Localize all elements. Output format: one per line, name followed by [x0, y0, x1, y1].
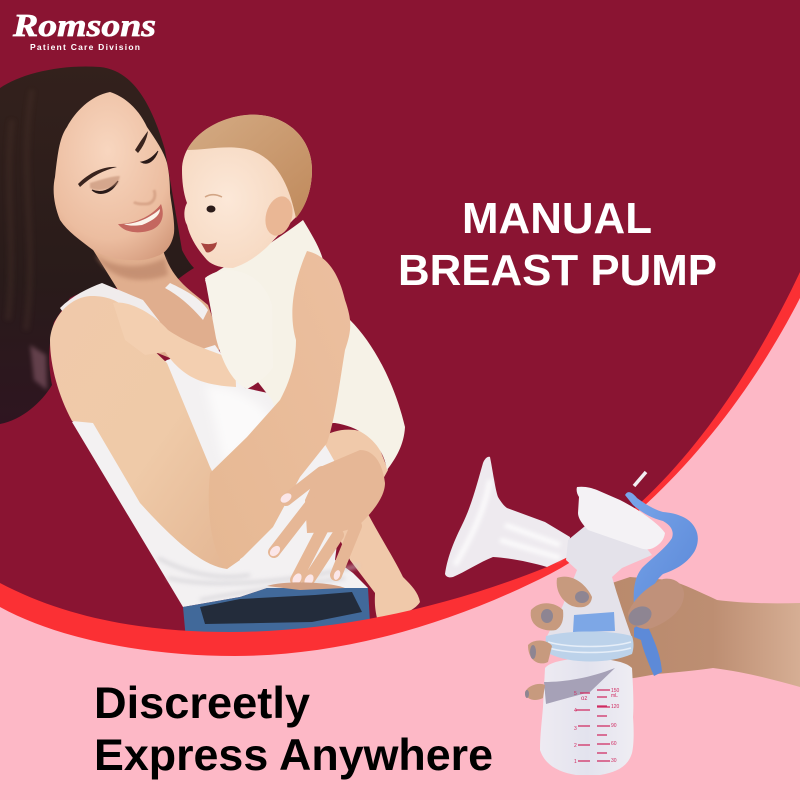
logo tagline: Patient Care Division [30, 42, 140, 52]
photo: mother and baby [0, 66, 420, 640]
baby's eyebrow [205, 195, 222, 197]
measurement labels: 3 [574, 726, 577, 732]
jeans and belt [183, 582, 371, 640]
measurement labels: 60 [611, 741, 617, 747]
mother's neck and chest [90, 245, 222, 372]
baby's onesie body [205, 220, 405, 470]
pump lever handle [625, 492, 698, 606]
forearm and palm [606, 577, 800, 687]
eyebrow left [78, 167, 117, 187]
baby's hair [187, 115, 312, 218]
measurement labels [574, 688, 620, 765]
mother's hair [0, 66, 194, 424]
bottle collar [546, 632, 634, 662]
measurement labels: 150 [611, 688, 620, 694]
mother's forearm and hand on baby's back [209, 251, 350, 569]
nose shadow [134, 190, 155, 204]
tank top strap [165, 283, 208, 320]
blue valve ring [573, 612, 615, 632]
neck shadow under chin [95, 255, 168, 280]
baby's head [182, 115, 312, 268]
fingernails [525, 591, 655, 698]
measurement marks [576, 690, 610, 761]
flange funnel [445, 457, 570, 577]
fingers gripping the pump [525, 577, 592, 700]
baby's leg and foot [303, 430, 420, 618]
tagline [94, 679, 493, 780]
flange highlights [455, 480, 560, 565]
mother's tank top [60, 283, 368, 607]
measurement labels: 90 [611, 723, 617, 729]
eyebrow right [135, 131, 148, 153]
mother's hand on hip [268, 450, 385, 587]
pink lower panel [0, 298, 800, 800]
lever lower end [634, 620, 662, 676]
measurement labels: oz [581, 696, 587, 702]
eye shadow tint [90, 176, 120, 190]
product: breast pump held in hand [445, 457, 800, 775]
measurement labels: 5 [574, 691, 577, 697]
brand logo [12, 7, 156, 52]
bottle [540, 658, 634, 775]
measurement labels: 120 [611, 704, 620, 710]
sleeve [205, 270, 273, 389]
baby's ear [261, 193, 297, 239]
baby's eye [206, 206, 216, 212]
measurement labels: 30 [611, 758, 617, 764]
mother's face [54, 92, 174, 260]
measurement labels: mL [611, 693, 618, 699]
eye right [141, 151, 158, 163]
valve stem [634, 472, 646, 486]
eye left [92, 181, 118, 193]
bottle shadow [544, 668, 615, 704]
tagline line 1: Discreetly [94, 679, 310, 728]
nails [268, 491, 342, 587]
title line 2: BREAST PUMP [398, 246, 717, 295]
measurement labels: 4 [574, 708, 577, 714]
measurement labels: 2 [574, 743, 577, 749]
thumb [628, 579, 684, 629]
title line 1: MANUAL [462, 194, 652, 243]
tagline line 2: Express Anywhere [94, 731, 493, 780]
smile [118, 204, 163, 232]
product title [398, 194, 717, 295]
baby's open mouth [201, 242, 217, 253]
pump connector body [546, 522, 652, 638]
baby's arm [113, 270, 273, 389]
teeth [124, 209, 160, 226]
logo wordmark: Romsons [12, 7, 156, 43]
curved red band [0, 272, 800, 800]
measurement labels: 1 [574, 759, 577, 765]
valve lid [577, 487, 665, 549]
mother's near arm [50, 296, 240, 569]
